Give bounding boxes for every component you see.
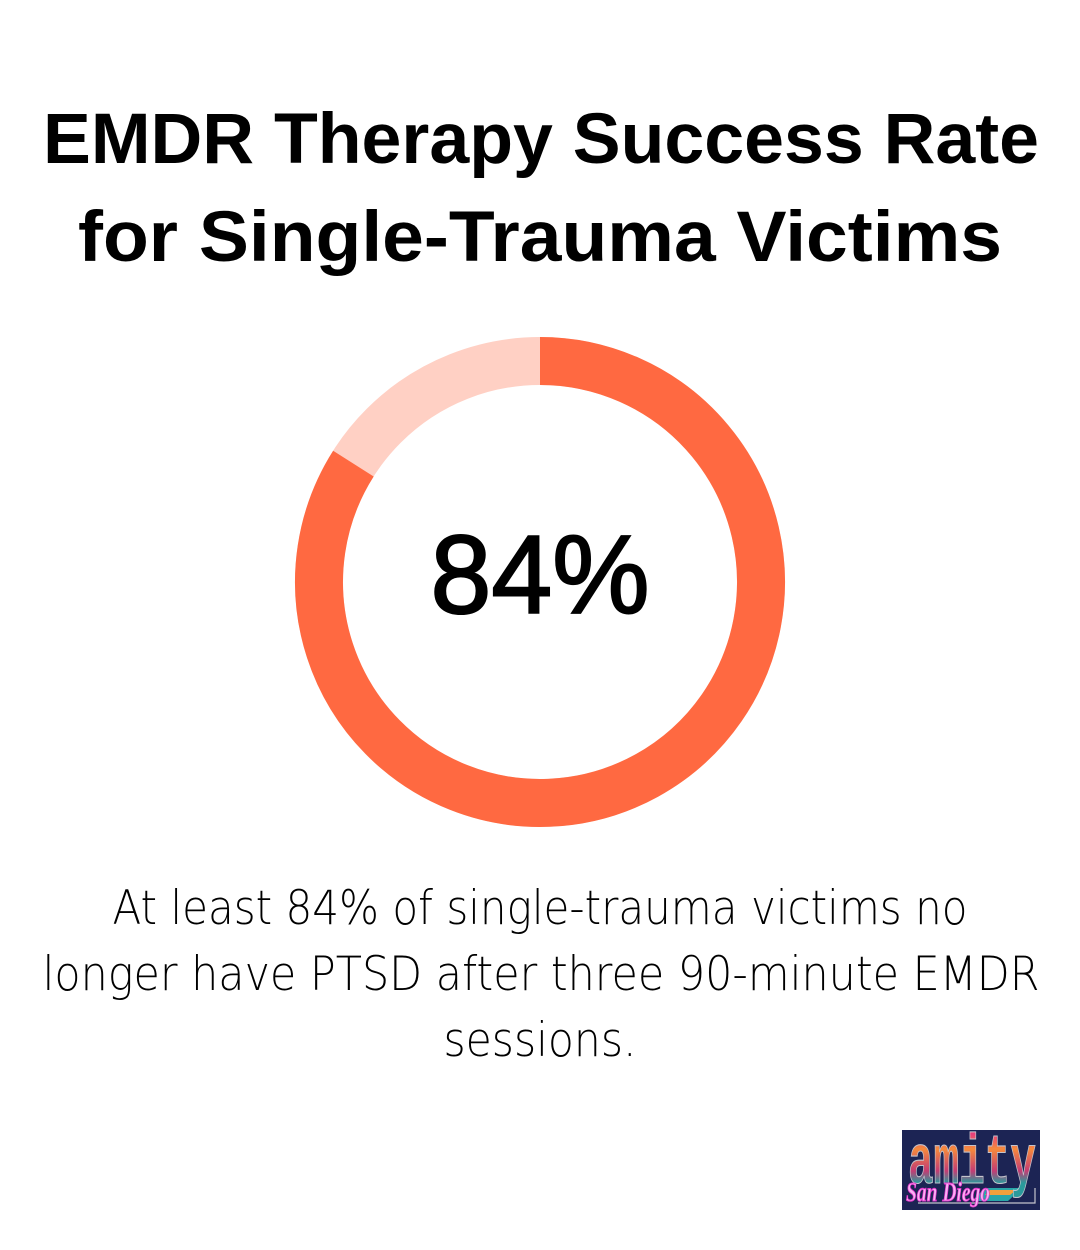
description text xyxy=(42,881,1040,1068)
title: EMDR Therapy Success Rate xyxy=(43,100,1039,179)
logo wordmark: amity xyxy=(908,1125,1036,1205)
title: for Single-Trauma Victims xyxy=(78,198,1002,277)
logo outline tail xyxy=(918,1188,1035,1203)
donut chart: 84% xyxy=(319,361,761,803)
description text: sessions. xyxy=(444,1013,636,1068)
logo background xyxy=(902,1130,1040,1210)
logo script: San Diego xyxy=(906,1177,990,1207)
logo shore stripes xyxy=(972,1188,1022,1201)
center value: 84% xyxy=(430,513,650,637)
remaining 16% track xyxy=(319,361,761,803)
title xyxy=(43,100,1039,277)
description text: At least 84% of single-trauma victims no xyxy=(112,881,968,936)
logo: Amity San Diego xyxy=(902,1125,1040,1210)
highlighted 84% arc xyxy=(319,361,761,803)
